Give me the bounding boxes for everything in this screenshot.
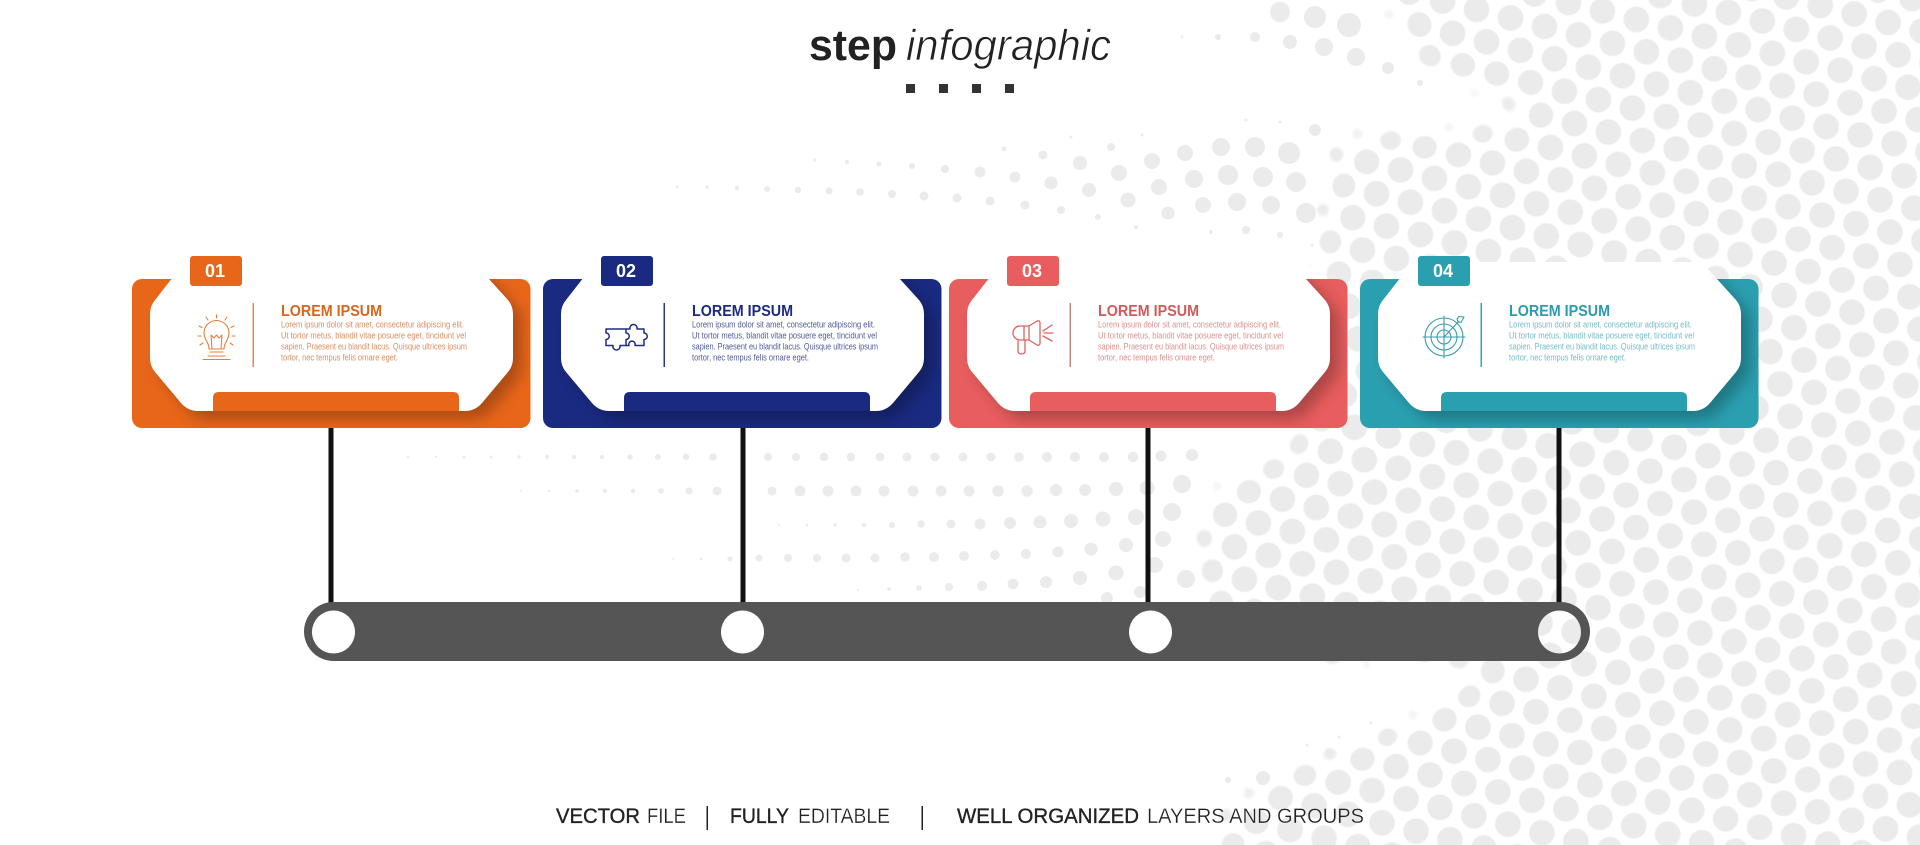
- text block: sapien. Praesent eu blandit lacus. Quisque ultrices ipsum: [281, 342, 467, 352]
- bottom tab: [1441, 392, 1687, 411]
- plate shadow: [570, 270, 933, 419]
- number badge: 02: [616, 261, 636, 281]
- footer tagline: LAYERS AND GROUPS: [1147, 805, 1364, 828]
- card base: [132, 279, 530, 428]
- background: hand-placed fading dots: [407, 2, 1423, 785]
- card base: [543, 279, 942, 428]
- text block: tortor, nec tempus felis ornare eget.: [281, 352, 398, 362]
- text block: Lorem ipsum dolor sit amet, consectetur adipiscing elit.: [1509, 320, 1692, 330]
- plate shadow: [159, 270, 522, 419]
- text block: Ut tortor metus, blandit vitae posuere eget, tincidunt vel: [1098, 330, 1283, 340]
- white plate: [1378, 262, 1741, 411]
- text block: sapien. Praesent eu blandit lacus. Quisque ultrices ipsum: [1098, 342, 1284, 352]
- text block: tortor, nec tempus felis ornare eget.: [1509, 352, 1626, 362]
- white plate: [150, 262, 513, 411]
- icon: megaphone: [1013, 321, 1053, 354]
- title: step: [809, 21, 897, 70]
- divider: [1070, 303, 1071, 367]
- text block: [281, 303, 467, 362]
- number badge: [1418, 256, 1470, 286]
- text block: Lorem ipsum dolor sit amet, consectetur adipiscing elit.: [281, 320, 464, 330]
- panel: step 04: [1360, 256, 1758, 428]
- text block: [692, 303, 878, 362]
- card base: [949, 279, 1348, 428]
- text block: Lorem ipsum dolor sit amet, consectetur adipiscing elit.: [1098, 320, 1281, 330]
- panel: step 02: [543, 256, 942, 428]
- title: infographic: [906, 21, 1111, 70]
- footer tagline: FULLY: [730, 805, 789, 828]
- divider: [664, 303, 665, 367]
- white plate: [967, 262, 1330, 411]
- footer tagline: EDITABLE: [798, 805, 890, 828]
- panel: step 03: [949, 256, 1348, 428]
- text block: Ut tortor metus, blandit vitae posuere eget, tincidunt vel: [692, 330, 877, 340]
- number badge: 01: [205, 261, 225, 281]
- title marker squares: [906, 84, 1014, 93]
- text block: Ut tortor metus, blandit vitae posuere eget, tincidunt vel: [281, 330, 466, 340]
- text block: Lorem ipsum dolor sit amet, consectetur adipiscing elit.: [692, 320, 875, 330]
- number badge: 04: [1433, 261, 1453, 281]
- icon: light bulb: [198, 315, 235, 360]
- footer tagline: [556, 805, 1364, 830]
- bottom tab: [624, 392, 870, 411]
- timeline bar with four circular holes: [304, 602, 1590, 661]
- text block: sapien. Praesent eu blandit lacus. Quisque ultrices ipsum: [692, 342, 878, 352]
- text block: LOREM IPSUM: [1098, 303, 1199, 320]
- number badge: 03: [1022, 261, 1042, 281]
- panel: step 01: [132, 256, 530, 428]
- card base: [1360, 279, 1758, 428]
- text block: LOREM IPSUM: [1509, 303, 1610, 320]
- text block: tortor, nec tempus felis ornare eget.: [1098, 352, 1215, 362]
- connector stems: [328, 428, 1562, 604]
- white plate: [561, 262, 924, 411]
- text block: [1098, 303, 1284, 362]
- number badge: [1007, 256, 1059, 286]
- icon: target with arrow: [1423, 316, 1465, 358]
- footer tagline: VECTOR: [556, 805, 640, 828]
- number badge: [601, 256, 653, 286]
- bottom tab: [213, 392, 459, 411]
- text block: Ut tortor metus, blandit vitae posuere eget, tincidunt vel: [1509, 330, 1694, 340]
- text block: LOREM IPSUM: [692, 303, 793, 320]
- text block: tortor, nec tempus felis ornare eget.: [692, 352, 809, 362]
- text block: sapien. Praesent eu blandit lacus. Quisque ultrices ipsum: [1509, 342, 1695, 352]
- footer tagline: FILE: [647, 805, 686, 828]
- icon: puzzle pieces: [606, 325, 647, 350]
- title: [809, 21, 1111, 70]
- bottom tab: [1030, 392, 1276, 411]
- text block: LOREM IPSUM: [281, 303, 382, 320]
- background: halftone dot field: [1196, 0, 1920, 845]
- text block: [1509, 303, 1695, 362]
- divider: [1480, 303, 1482, 367]
- number badge: [190, 256, 242, 286]
- divider: [252, 303, 254, 367]
- plate shadow: [1387, 270, 1750, 419]
- plate shadow: [976, 270, 1339, 419]
- footer tagline: WELL ORGANIZED: [957, 805, 1139, 828]
